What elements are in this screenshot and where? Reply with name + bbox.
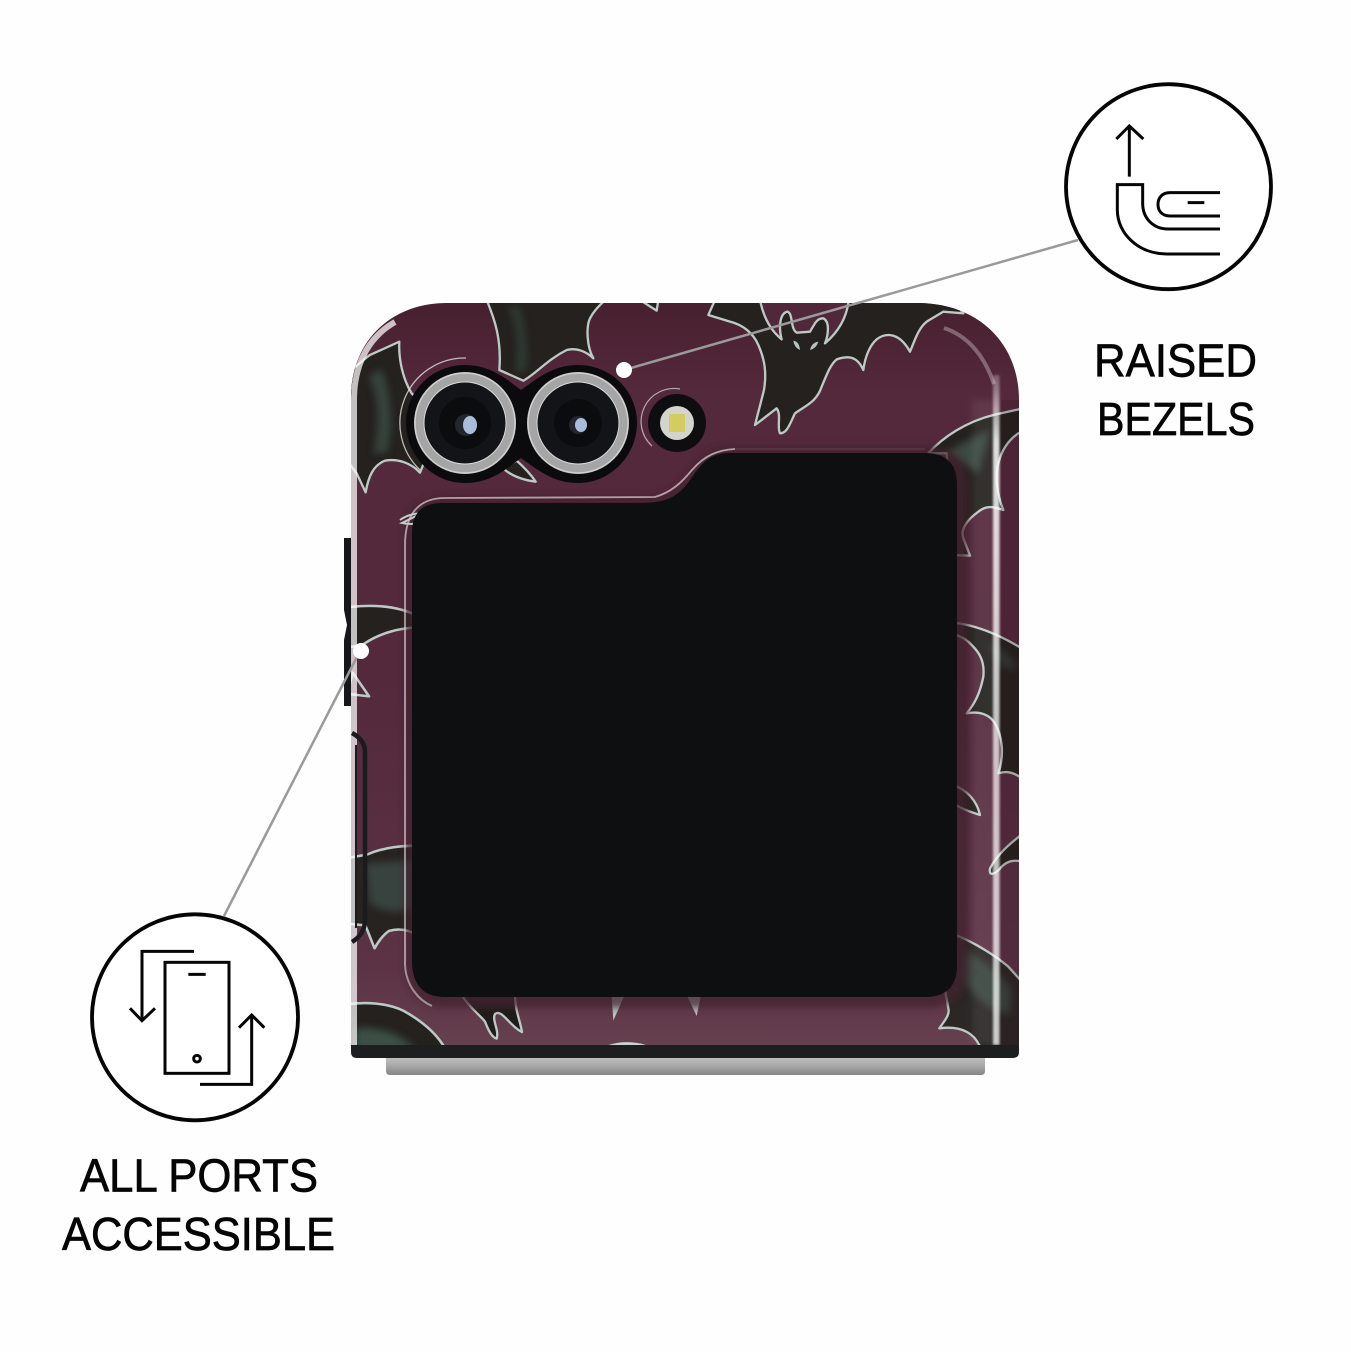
case body: [351, 303, 1019, 1045]
port cutout: [352, 733, 365, 942]
flash: [641, 388, 706, 452]
bat: top right with face: [708, 300, 963, 433]
hinge: [386, 1056, 985, 1075]
label: raised bezels: RAISED: [1094, 334, 1257, 386]
icon: raised bezels: [1066, 84, 1271, 289]
icon: all ports accessible: [92, 914, 298, 1120]
bat eyes: [793, 341, 818, 350]
label: raised bezels: [1094, 334, 1257, 445]
bat wings: left edge: [347, 606, 445, 1051]
callout line: all ports: [224, 643, 369, 916]
glossy highlights: [354, 322, 1019, 1045]
bat pattern: [347, 300, 1023, 1051]
rear cameras: [400, 358, 706, 483]
black base strip: [351, 1040, 1019, 1058]
side button: [344, 538, 351, 706]
bat wings: right edge: [928, 408, 1023, 779]
label: all ports accessible: ACCESSIBLE: [62, 1208, 335, 1260]
label: all ports accessible: [62, 1150, 335, 1260]
cover screen: [412, 453, 957, 997]
bezel edge lines: [400, 449, 925, 1006]
label: raised bezels: BEZELS: [1097, 393, 1255, 445]
phone with bat case: [344, 300, 1023, 1075]
bat feet and wing tips at bottom: [462, 995, 701, 1045]
bat wings: top left: [347, 300, 658, 492]
label: all ports accessible: ALL PORTS: [80, 1150, 318, 1202]
left lens: [414, 372, 516, 474]
camera housing: [406, 365, 637, 483]
callout line: raised bezels: [616, 240, 1078, 378]
raised bezel around cover screen: [414, 455, 959, 999]
right lens: [527, 372, 629, 474]
